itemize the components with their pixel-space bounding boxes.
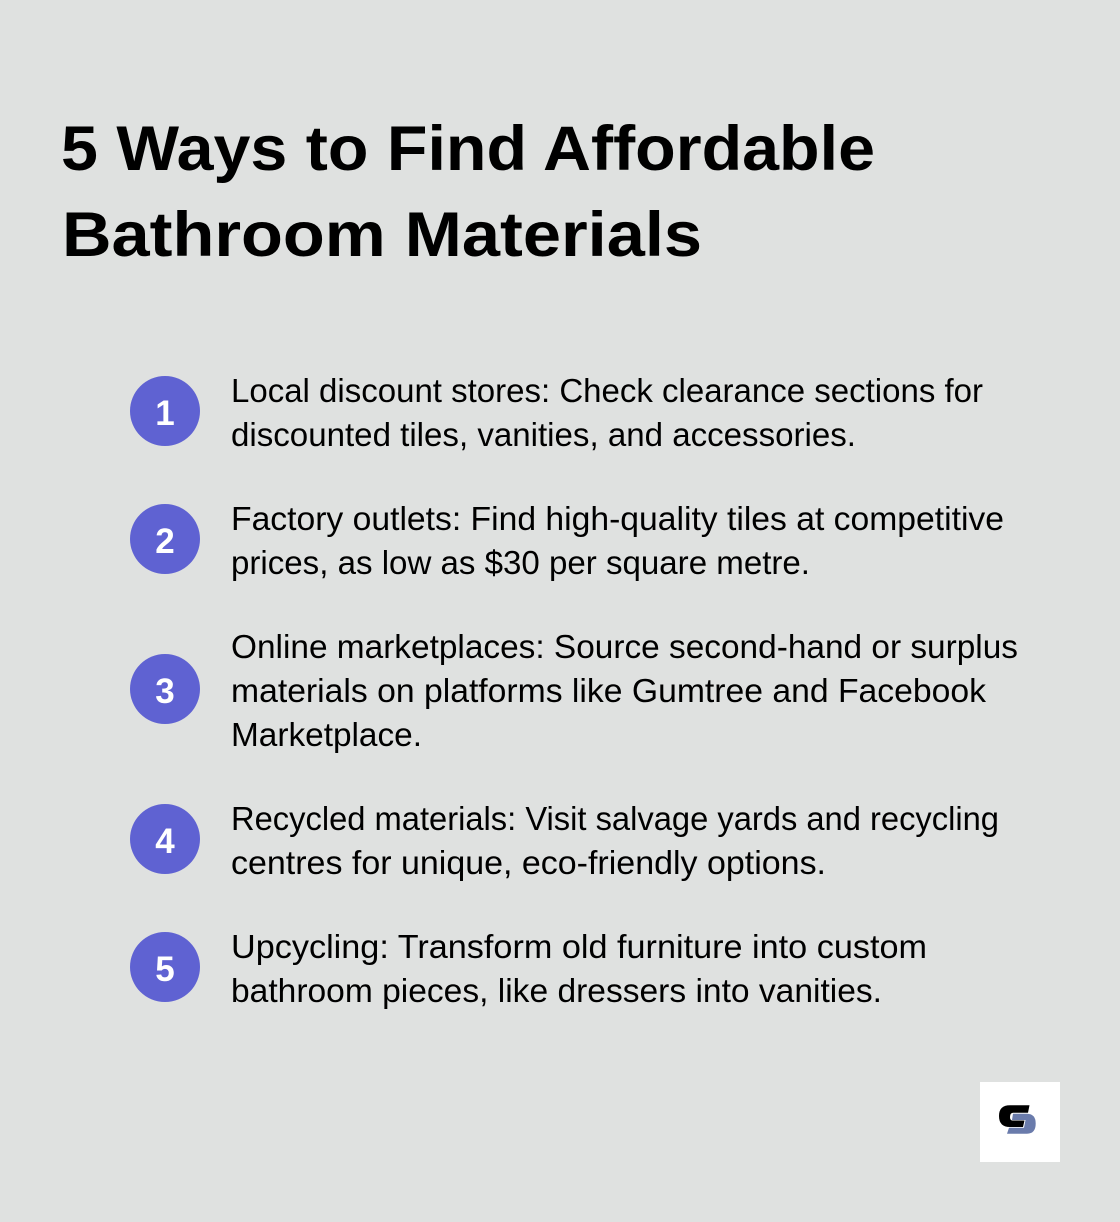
text: factory outlets: prices, as low as $30 per square metre. [231, 544, 810, 581]
icon: number 1 badge: 1 [155, 394, 175, 433]
text: online marketplaces: Marketplace. [231, 716, 422, 753]
text: factory outlets: Factory outlets: Find high-quality tiles at competitive [231, 500, 1004, 537]
text: recycled materials [231, 800, 999, 881]
text: online marketplaces: materials on platforms like Gumtree and Facebook [231, 672, 987, 709]
list item 2 [130, 500, 1004, 581]
logo [980, 1082, 1060, 1162]
text: factory outlets [231, 500, 1004, 581]
text: recycled materials: Recycled materials: Visit salvage yards and recycling [231, 800, 999, 837]
icon: number 2 badge: 2 [155, 522, 175, 561]
icon: number 5 badge: 5 [155, 950, 175, 989]
list item 5 [130, 928, 927, 1009]
text: upcycling [231, 928, 927, 1009]
list item 4 [130, 800, 999, 881]
text: online marketplaces [231, 628, 1018, 753]
icon: number 1 badge [130, 376, 200, 446]
icon: number 3 badge: 3 [155, 672, 175, 711]
title: Bathroom Materials [62, 200, 702, 270]
title: 5 Ways to Find Affordable [61, 114, 875, 184]
text: recycled materials: centres for unique, eco-friendly options. [231, 844, 826, 881]
icon: number 2 badge [130, 504, 200, 574]
icon: number 4 badge: 4 [155, 822, 175, 861]
icon: number 3 badge [130, 654, 200, 724]
text: online marketplaces: Online marketplaces: Source second-hand or surplus [231, 628, 1018, 665]
text: upcycling: Upcycling: Transform old furniture into custom [231, 928, 927, 965]
title [61, 114, 875, 270]
list item 1 [130, 372, 983, 453]
list item 3 [130, 628, 1018, 753]
text: local discount stores: discounted tiles, vanities, and accessories. [231, 416, 856, 453]
text: local discount stores: Local discount stores: Check clearance sections for [231, 372, 983, 409]
text: local discount stores [231, 372, 983, 453]
icon: number 4 badge [130, 804, 200, 874]
text: upcycling: bathroom pieces, like dressers into vanities. [231, 972, 882, 1009]
icon: number 5 badge [130, 932, 200, 1002]
